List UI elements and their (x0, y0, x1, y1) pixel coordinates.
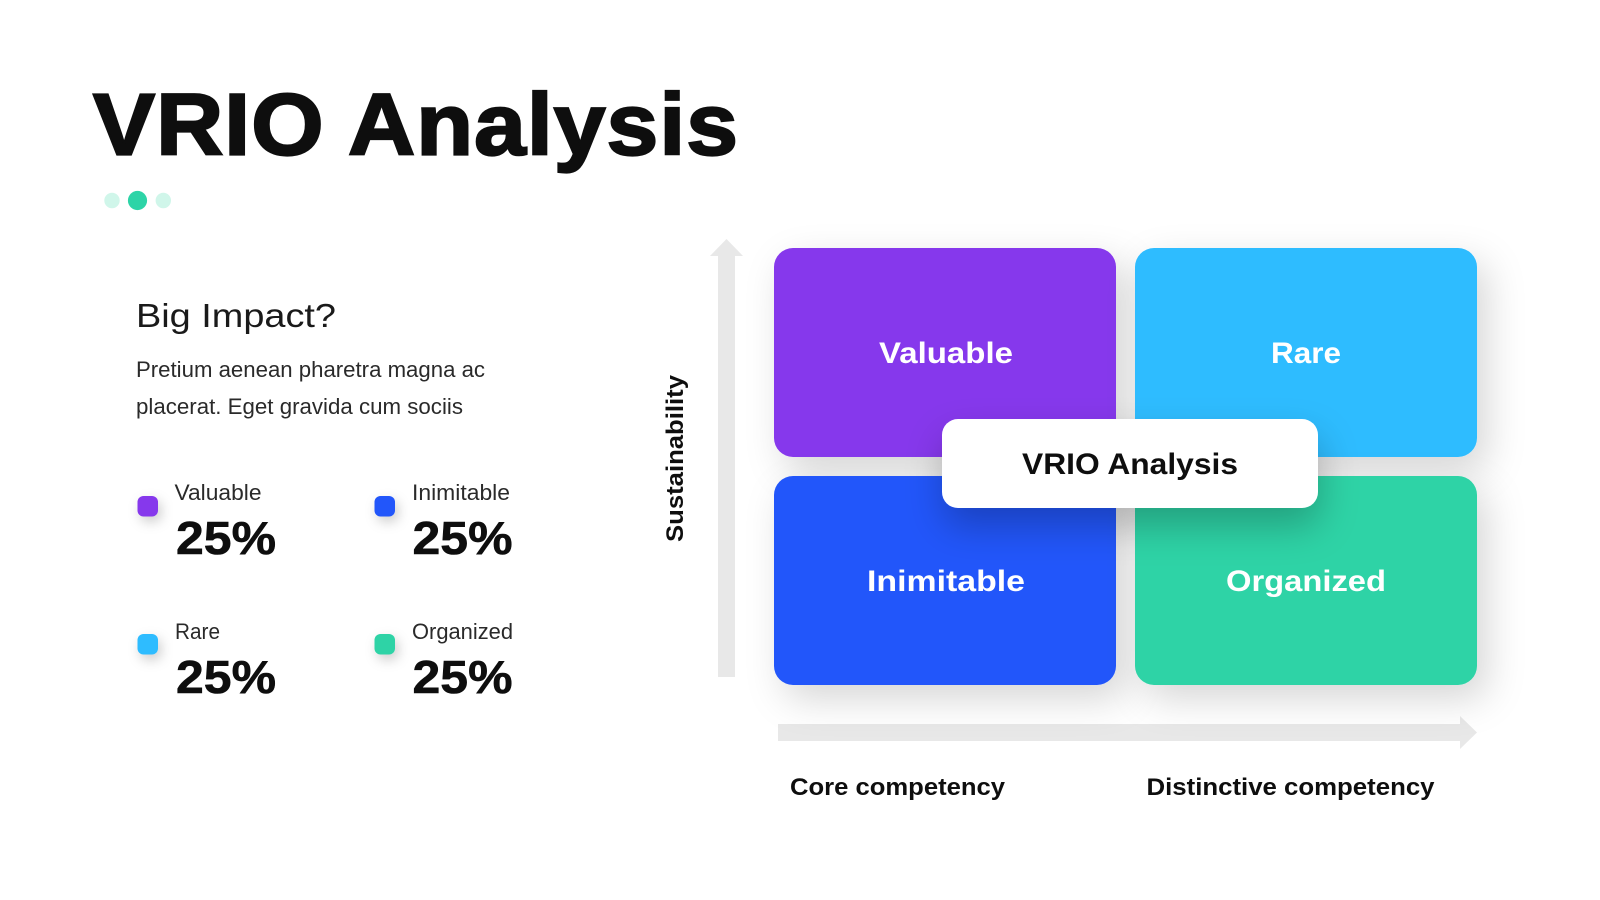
axis label: Core competency: Core competency (790, 774, 1006, 801)
legend: Valuable: Valuable (174, 480, 262, 505)
matrix cell: Valuable: Valuable (879, 337, 1013, 370)
matrix cell: Rare: Rare (1271, 337, 1341, 370)
icon: blue swatch (374, 496, 395, 516)
legend: Organized: Organized (412, 619, 513, 644)
text block: description: placerat. Eget gravida cum sociis (136, 394, 463, 419)
legend: Organized (374, 619, 513, 703)
matrix cell: Organized (1135, 476, 1477, 685)
matrix cell: Inimitable (774, 476, 1116, 685)
icon: cyan swatch (138, 634, 158, 654)
matrix cell: Organized: Organized (1226, 565, 1386, 598)
legend: Organized: 25% (412, 651, 512, 703)
decorative dots (104, 191, 171, 210)
matrix cell: Inimitable: Inimitable (867, 565, 1025, 598)
legend: Rare: 25% (176, 651, 276, 703)
center callout: VRIO Analysis (942, 419, 1318, 508)
heading: Big Impact: Big Impact? (136, 297, 336, 334)
legend: Rare: Rare (175, 619, 220, 644)
legend: Inimitable: Inimitable (412, 480, 510, 505)
center callout: VRIO Analysis: VRIO Analysis (1022, 448, 1238, 481)
legend: Rare (138, 619, 276, 703)
matrix cell: Valuable (774, 248, 1116, 457)
title: VRIO Analysis (93, 76, 739, 174)
icon: purple swatch (138, 496, 158, 516)
axis label: Distinctive competency: Distinctive competency (1146, 774, 1435, 801)
legend: Valuable (138, 480, 276, 564)
axis label: Sustainability: Sustainability (662, 374, 689, 542)
text block: description: Pretium aenean pharetra magna ac (136, 357, 485, 382)
legend: Inimitable: 25% (412, 512, 512, 564)
text block: description (136, 357, 485, 419)
legend: Valuable: 25% (176, 512, 276, 564)
legend: Inimitable (374, 480, 512, 564)
matrix cell: Rare (1135, 248, 1477, 457)
arrow: horizontal axis (778, 716, 1477, 749)
arrow: vertical axis (710, 239, 743, 677)
icon: green swatch (374, 634, 395, 654)
